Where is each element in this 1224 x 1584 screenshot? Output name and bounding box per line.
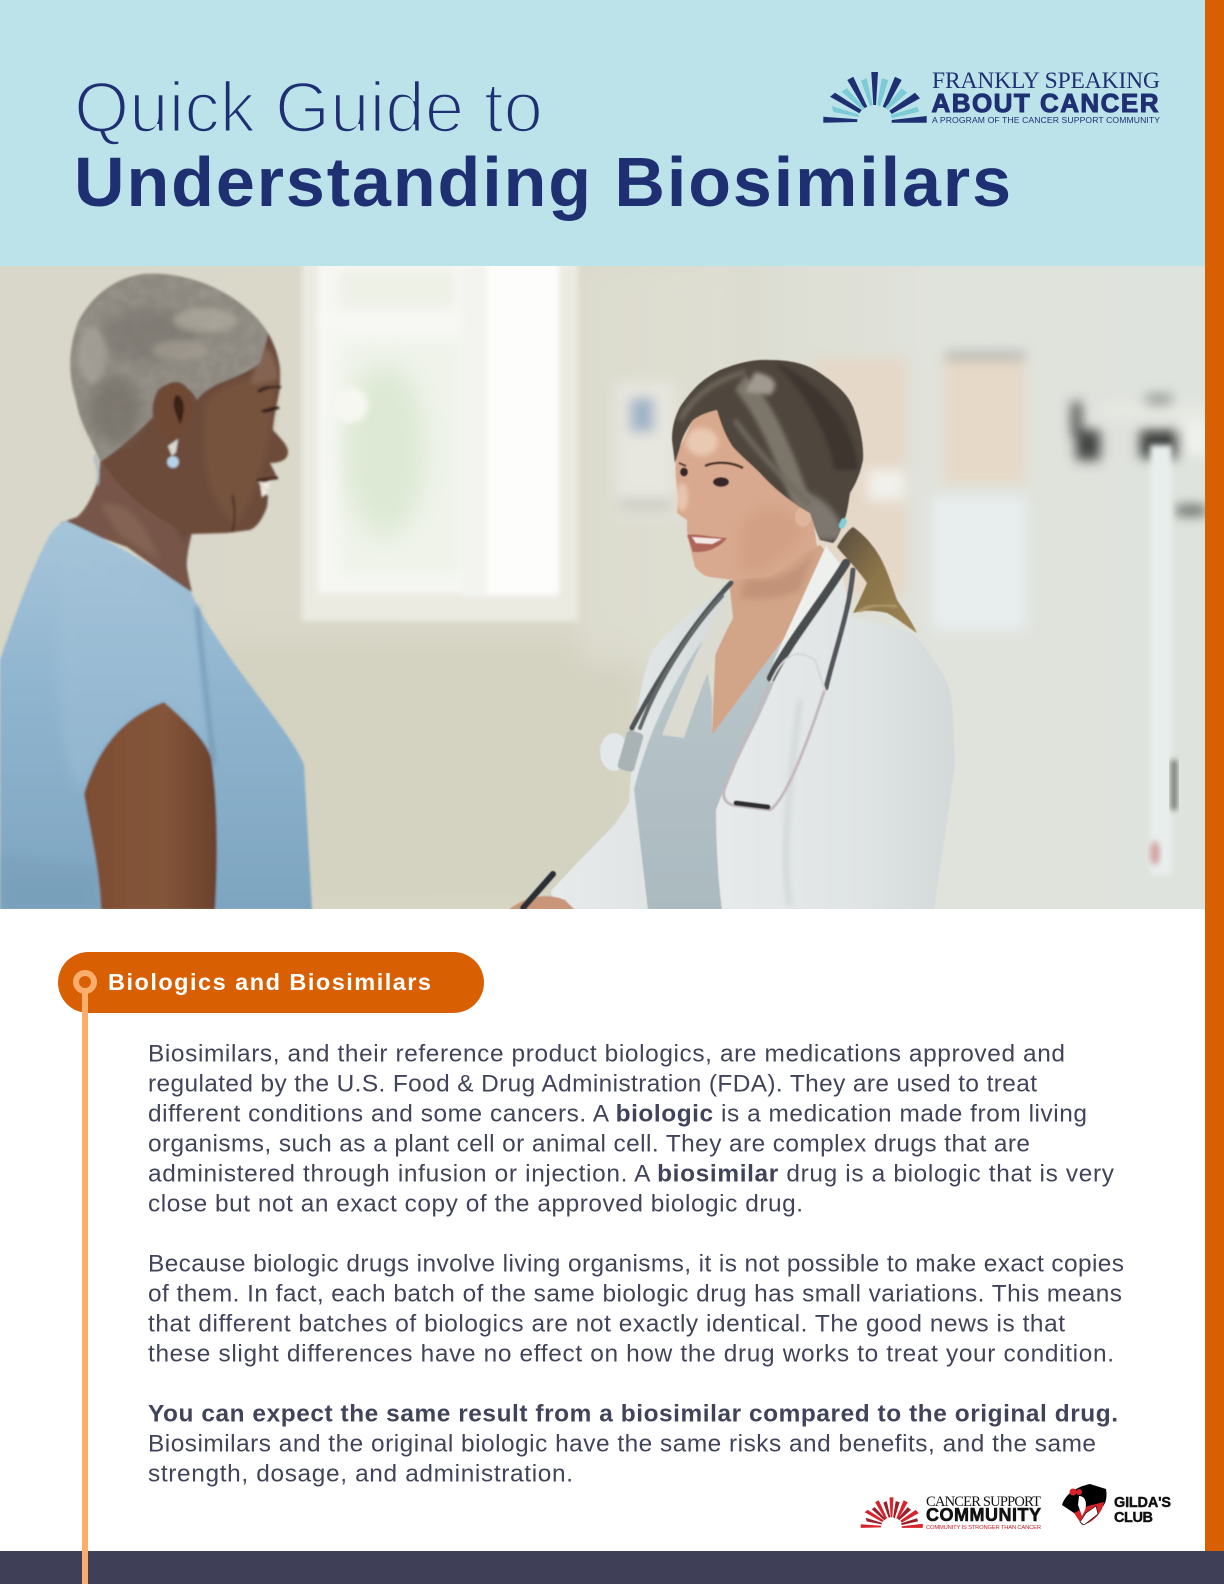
doctor: woman in white coat: [508, 355, 955, 910]
timeline marker: ring and vertical line: [76, 973, 94, 1584]
text block: paragraph 1: close but not an exact copy of the approved biologic drug.: [148, 1190, 803, 1218]
patient: woman in blue shirt: [0, 274, 312, 910]
header band: [0, 0, 1205, 266]
icon: Gilda figure: [1062, 1484, 1107, 1525]
doctor scrubs: [634, 642, 782, 909]
doctor ponytail: [837, 527, 917, 633]
text block: paragraph 2: that different batches of biologics are not exactly identical. The good news is that: [148, 1310, 1065, 1338]
patient face: [100, 329, 288, 534]
text block: paragraph 3: strength, dosage, and administration.: [148, 1460, 573, 1488]
doctor stethoscope: [632, 563, 853, 810]
doctor hand and pen: [508, 874, 575, 910]
blurred wall posters: [615, 352, 1026, 630]
text block: paragraph 3: [148, 1400, 1118, 1488]
text block: paragraph 1: Biosimilars, and their reference product biologics, are medications approved and: [148, 1040, 1065, 1068]
section heading pill: [58, 952, 484, 1013]
logo text: Community: COMMUNITY: [926, 1505, 1041, 1525]
footer band: [0, 1551, 1224, 1584]
logo text: Frankly Speaking: FRANKLY SPEAKING: [932, 68, 1160, 94]
photo background: clinic wall and window: [0, 255, 1210, 910]
text block: paragraph 2: of them. In fact, each batch of the same biologic drug has small variations. This means: [148, 1280, 1122, 1308]
logo text: tagline: COMMUNITY IS STRONGER THAN CANCER: [926, 1525, 1041, 1531]
icon: navy and teal sunburst: [823, 72, 927, 123]
doctor stethoscope chest piece: [600, 730, 644, 773]
photo: patient talking with doctor: [0, 255, 1210, 910]
icon: red sunburst: [861, 1497, 923, 1528]
text block: paragraph 2: Because biologic drugs involve living organisms, it is not possible to make exact copies: [148, 1250, 1124, 1278]
logo text: About Cancer: ABOUT CANCER: [932, 88, 1159, 118]
title line: Quick Guide to: Quick Guide to: [74, 69, 543, 148]
text block: paragraph 2: [148, 1250, 1124, 1368]
text block: paragraph 1: [148, 1040, 1115, 1218]
text block: paragraph 2: these slight differences have no effect on how the drug works to treat your condition.: [148, 1340, 1114, 1368]
doctor eyes, brows and mouth: [679, 463, 743, 552]
timeline line over footer: [82, 1551, 88, 1584]
title: [74, 69, 1011, 221]
text block: paragraph 1: organisms, such as a plant cell or animal cell. They are complex drugs that are: [148, 1130, 1030, 1158]
logo text: Gilda's: GILDA'S: [1114, 1495, 1171, 1511]
right orange side bar: [1205, 0, 1224, 1551]
logo: Frankly Speaking About Cancer: [823, 68, 1160, 125]
logo: Gilda's Club: [1062, 1484, 1171, 1526]
doctor hair: [671, 359, 864, 544]
blurred scale: [1072, 395, 1210, 515]
doctor neck and chest: [712, 544, 824, 734]
patient hair: [70, 274, 268, 462]
logo: Cancer Support Community: [861, 1494, 1041, 1531]
text block: paragraph 1: different conditions and some cancers. A biologic is a medication made from living: [148, 1100, 1087, 1128]
doctor white coat: [551, 583, 730, 910]
logo text: Cancer Support: CANCER SUPPORT: [926, 1494, 1041, 1510]
text block: paragraph 1: regulated by the U.S. Food & Drug Administration (FDA). They are used to treat: [148, 1070, 1037, 1098]
patient ear and earring: [165, 380, 187, 470]
panel: Biologics and Biosimilars: [58, 952, 1124, 1584]
patient neck: [60, 460, 193, 592]
text block: paragraph 3: You can expect the same result from a biosimilar compared to the original drug.: [148, 1400, 1118, 1428]
doctor face: [676, 405, 817, 580]
text block: paragraph 3: Biosimilars and the original biologic have the same risks and benefits, and the same: [148, 1430, 1096, 1458]
text block: paragraph 1: administered through infusion or injection. A biosimilar drug is a biologic that is very: [148, 1160, 1115, 1188]
title line: Understanding Biosimilars: Understanding Biosimilars: [74, 143, 1011, 221]
logo text: program tagline: A PROGRAM OF THE CANCER SUPPORT COMMUNITY: [932, 115, 1160, 125]
patient eye, brow and mouth: [257, 386, 281, 497]
logo text: Club: CLUB: [1114, 1510, 1153, 1526]
patient arm: [84, 702, 217, 910]
section heading pill: Biologics and Biosimilars: [108, 969, 431, 995]
patient shirt: [0, 521, 312, 910]
